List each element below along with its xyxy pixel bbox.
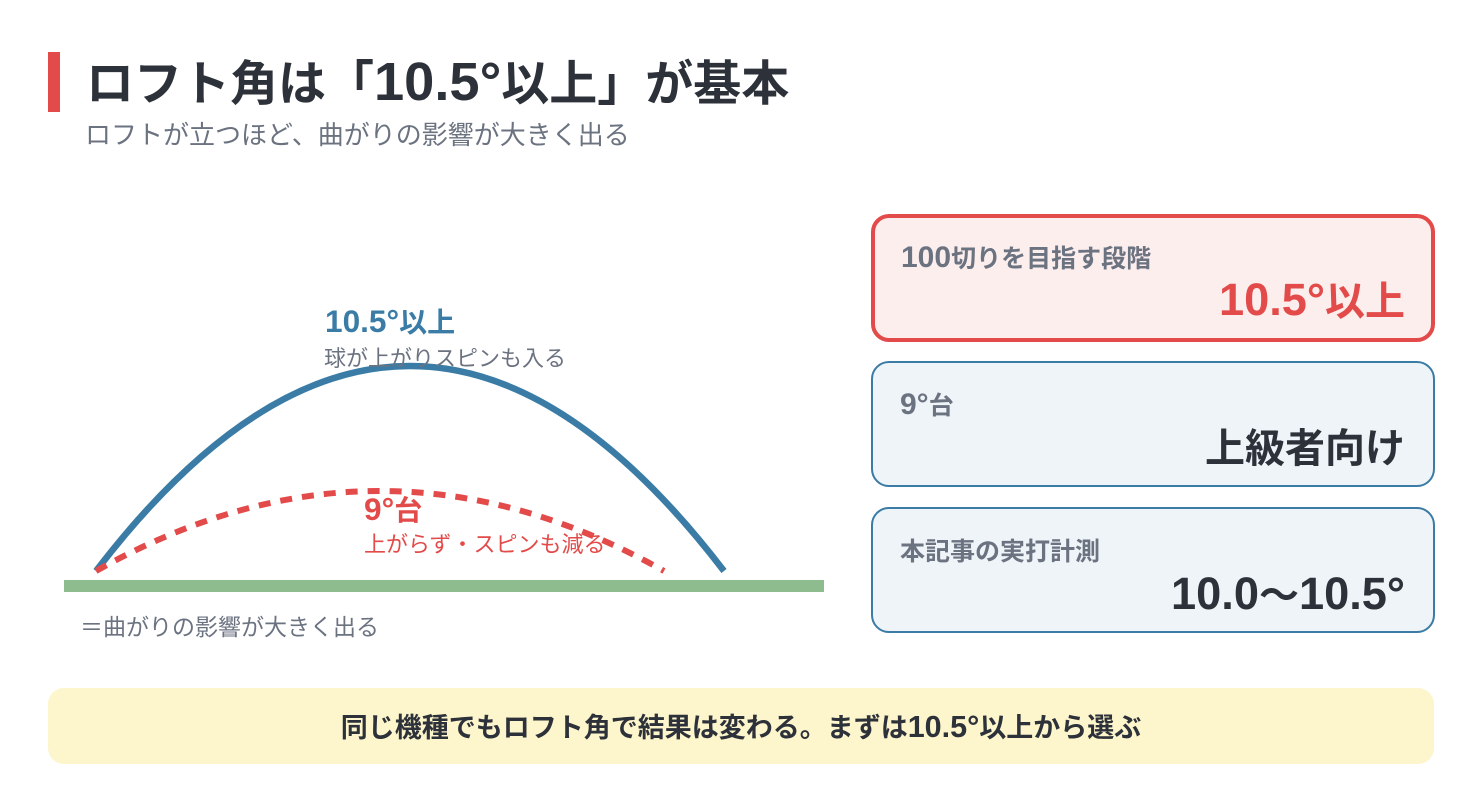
conclusion banner <box>48 688 1434 764</box>
trajectory chart <box>64 303 824 640</box>
card label: 9°台 <box>900 388 954 421</box>
subtitle: ロフトが立つほど、曲がりの影響が大きく出る <box>85 120 630 150</box>
card: 9°台 <box>871 361 1435 487</box>
card label: 100切りを目指す段階 <box>901 241 1151 274</box>
card value: 10.0〜10.5° <box>1171 568 1405 619</box>
ground line <box>64 580 824 592</box>
low trajectory dashed curve <box>96 491 664 571</box>
low trajectory note: 上がらず・スピンも減る <box>364 532 606 557</box>
card value: 上級者向け <box>1205 427 1405 471</box>
card: 実打計測 <box>871 507 1435 633</box>
title accent bar <box>48 52 60 112</box>
high trajectory curve <box>96 366 724 571</box>
conclusion banner: 同じ機種でもロフト角で結果は変わる。まずは10.5°以上から選ぶ <box>341 710 1141 744</box>
card label: 本記事の実打計測 <box>900 538 1100 566</box>
card: 100切り <box>871 214 1435 342</box>
chart caption: ＝曲がりの影響が大きく出る <box>80 614 379 640</box>
title: ロフト角は「10.5°以上」が基本 <box>86 52 789 112</box>
card value: 10.5°以上 <box>1219 274 1405 325</box>
low trajectory label: 9°台 <box>364 491 422 527</box>
high trajectory note: 球が上がりスピンも入る <box>324 346 566 371</box>
high trajectory label: 10.5°以上 <box>325 303 455 339</box>
